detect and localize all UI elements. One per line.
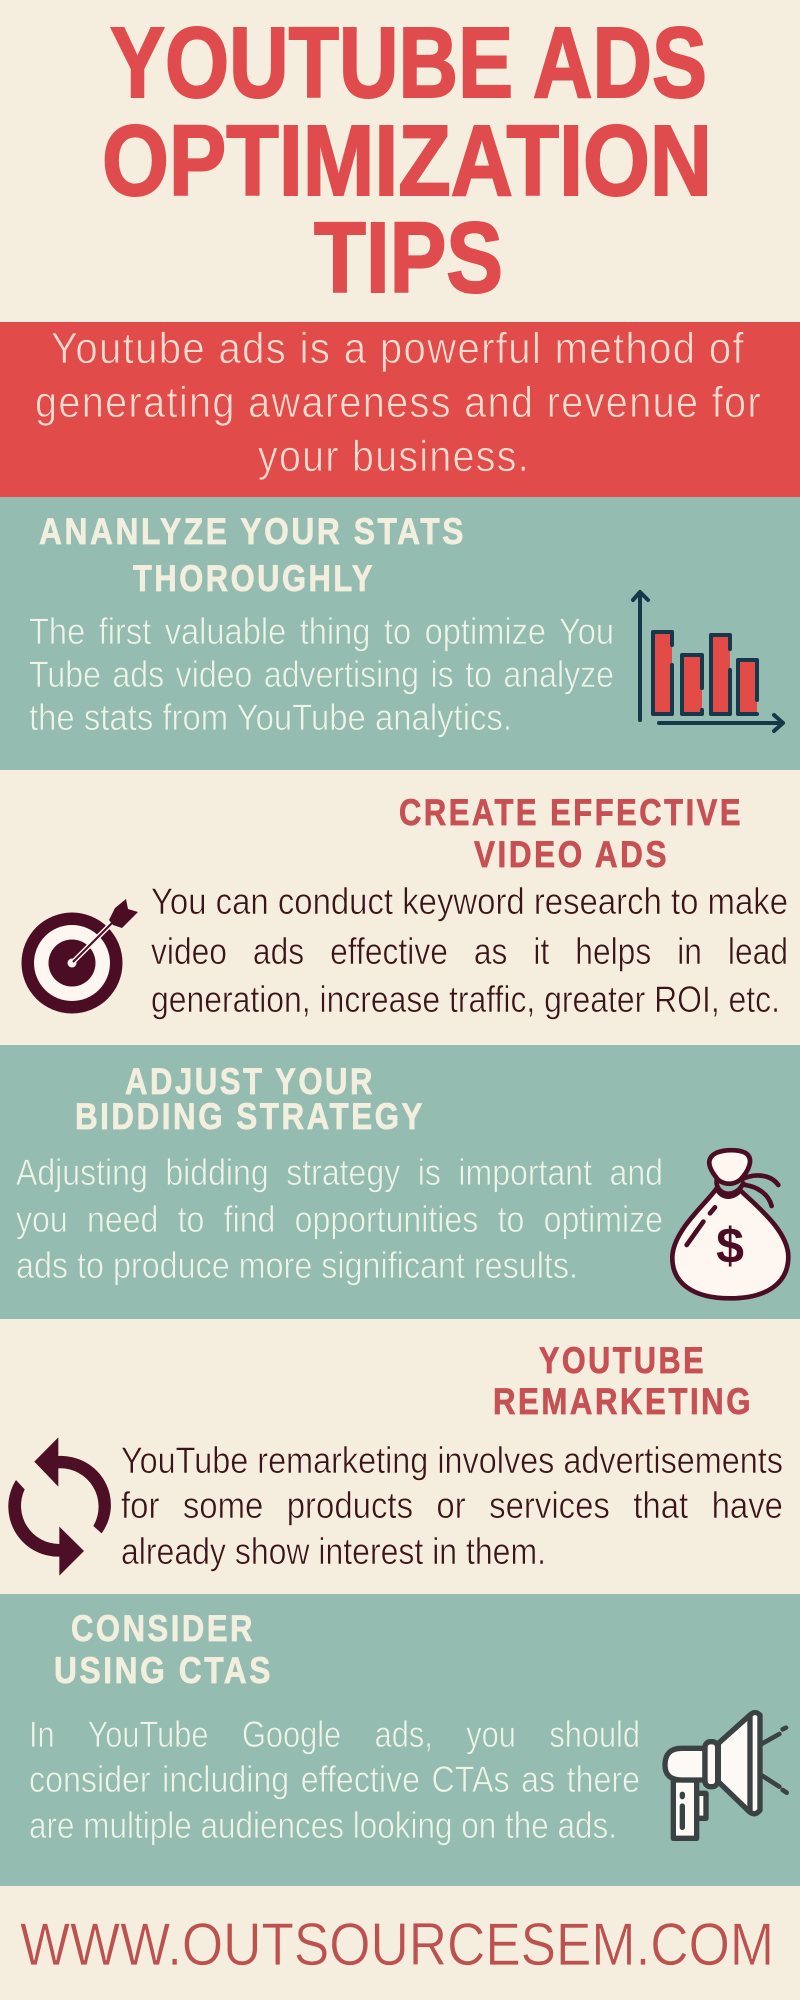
heading: create effective video ads [399,792,743,875]
icon: megaphone [665,1712,787,1838]
heading: youtube remarketing: REMARKETING [493,1381,753,1422]
text block: analyze your stats: the stats from YouTube analytics. [29,697,512,738]
text block: adjust your bidding strategy [16,1152,663,1286]
text block: consider using ctas [29,1714,640,1846]
panel: analyze your stats [0,497,800,770]
heading: consider using ctas: CONSIDER [71,1608,255,1649]
text block: analyze your stats [29,611,614,738]
heading: adjust your bidding strategy [75,1061,425,1137]
text block: adjust your bidding strategy: Adjusting bidding strategy is important and [16,1152,663,1193]
title: TIPS [314,202,503,314]
icon: bar chart [633,592,783,731]
heading: youtube remarketing: YOUTUBE [539,1340,706,1381]
panel: intro banner [0,322,800,497]
heading: analyze your stats: ANANLYZE YOUR STATS [39,511,466,552]
panel: adjust your bidding strategy [0,1045,800,1319]
heading: consider using ctas [54,1608,273,1691]
panel: consider using ctas [0,1594,800,1886]
icon: money bag [672,1150,788,1298]
icon: money bag: $ [716,1218,744,1274]
text block: youtube remarketing: already show interest in them. [121,1531,546,1572]
text block: consider using ctas: consider including effective CTAs as there [29,1759,640,1800]
heading: consider using ctas: USING CTAS [54,1650,273,1691]
heading: youtube remarketing [493,1340,753,1422]
text block: analyze your stats: The first valuable thing to optimize You [29,611,614,652]
heading: create effective video ads: VIDEO ADS [474,834,669,875]
heading: create effective video ads: CREATE EFFECTIVE [399,792,743,833]
text block: consider using ctas: are multiple audiences looking on the ads. [29,1805,617,1846]
icon: target with arrow [22,899,138,1014]
heading: analyze your stats: THOROUGHLY [133,558,375,599]
panel: youtube remarketing [0,1319,800,1594]
text block: adjust your bidding strategy: ads to produce more significant results. [16,1245,578,1286]
title [102,7,712,314]
heading: adjust your bidding strategy: BIDDING STRATEGY [75,1096,425,1137]
text block: youtube remarketing [121,1440,783,1572]
text block: adjust your bidding strategy: you need to find opportunities to optimize [16,1199,663,1240]
title: OPTIMIZATION [102,105,712,217]
panel: intro banner: Youtube ads is a powerful method of [51,324,745,373]
text block: analyze your stats: Tube ads video advertising is to analyze [29,654,614,695]
text block: consider using ctas: In YouTube Google ads, you should [29,1714,640,1755]
text block: create effective video ads [151,881,788,1020]
panel: create effective video ads [0,770,800,1045]
heading: analyze your stats [39,511,466,599]
heading: adjust your bidding strategy: ADJUST YOUR [125,1061,375,1102]
icon: refresh arrows [8,1437,111,1576]
panel: intro banner: your business. [258,432,530,481]
